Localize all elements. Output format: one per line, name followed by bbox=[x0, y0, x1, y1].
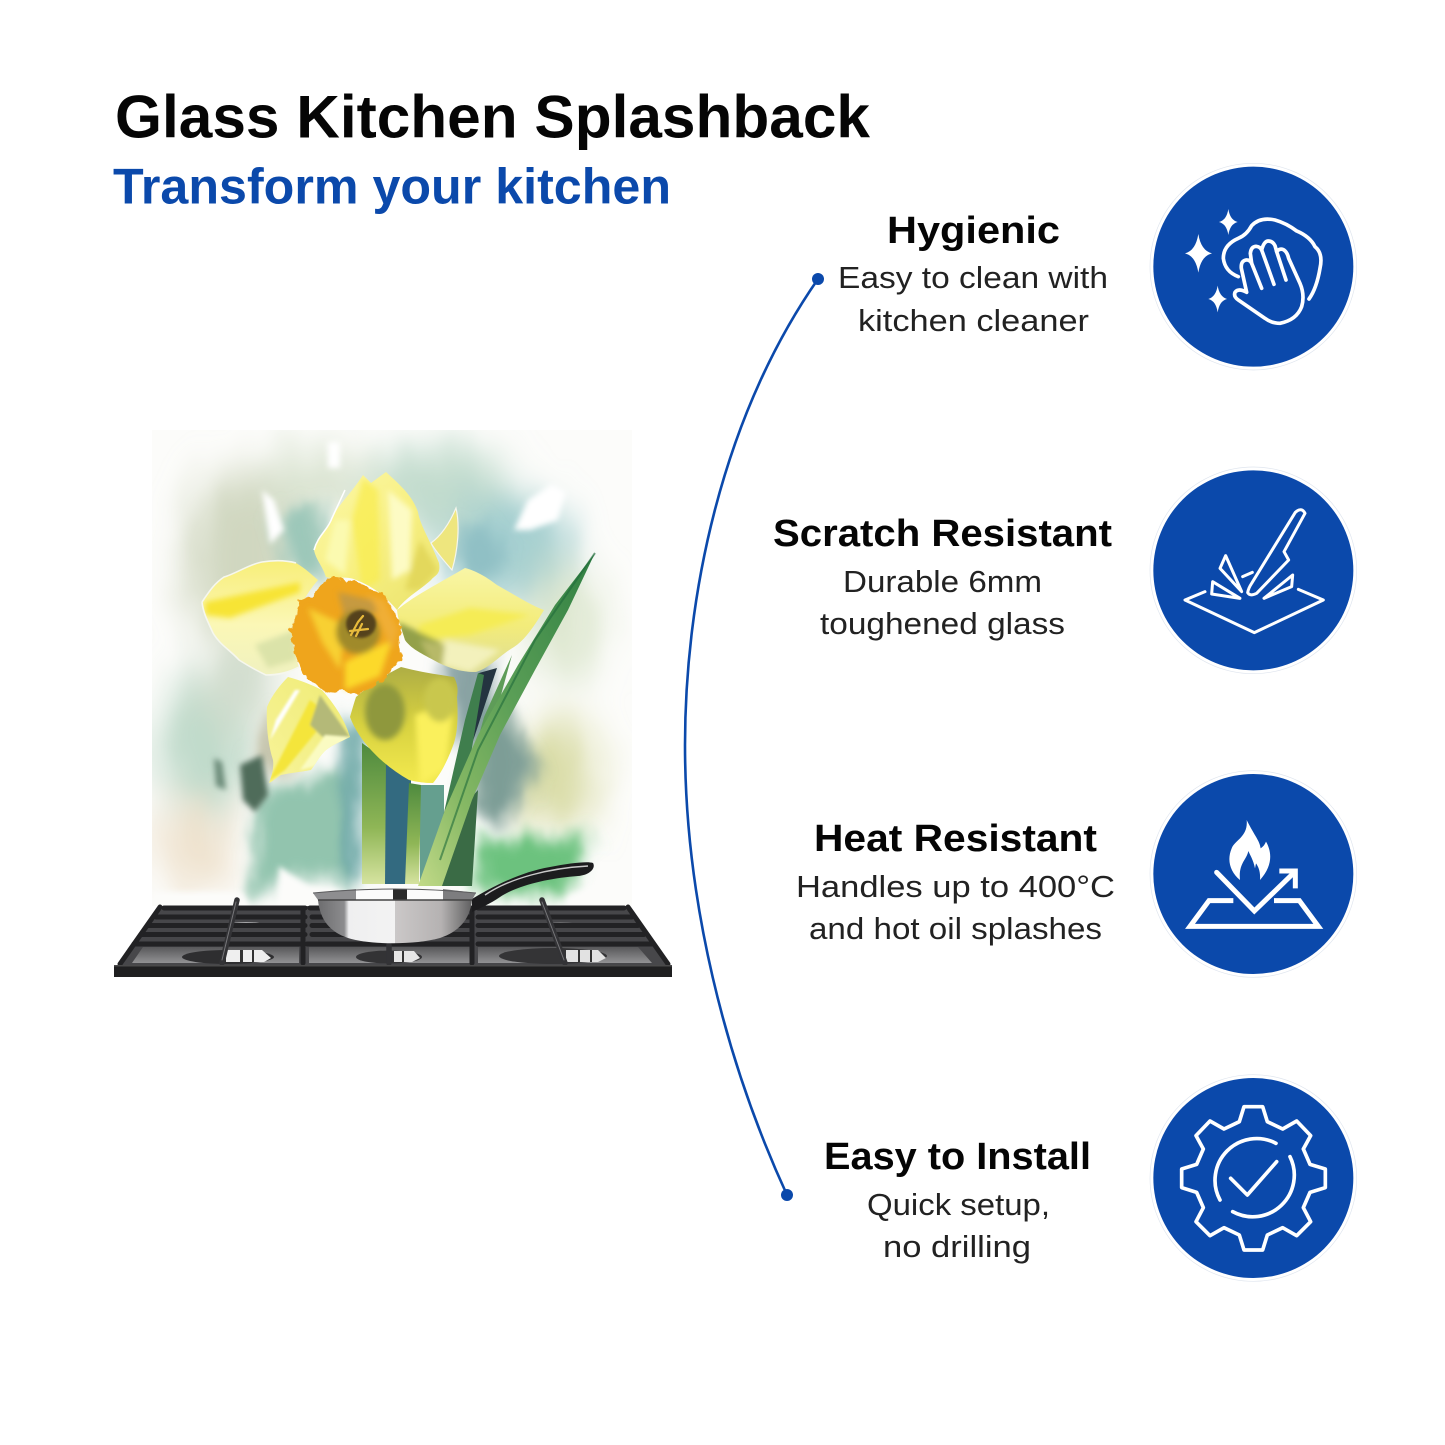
feature: easy to install text bbox=[824, 1136, 1091, 1264]
pan rim bbox=[313, 889, 476, 900]
corona bbox=[290, 575, 403, 695]
feature: heat resistant text: Handles up to 400°C bbox=[796, 869, 1115, 904]
pan handle bbox=[472, 862, 594, 912]
pan body bbox=[318, 900, 472, 943]
petal: right bbox=[395, 565, 547, 675]
feature: hygienic text: Hygienic bbox=[887, 210, 1060, 252]
panel: daffodil watercolour splashback bbox=[152, 430, 632, 916]
feature: heat resistant text: and hot oil splashes bbox=[809, 911, 1102, 946]
petal: top bbox=[310, 470, 445, 610]
petal: bottom left bbox=[266, 677, 350, 783]
feature: hygienic text: Easy to clean with bbox=[838, 260, 1108, 295]
icon: heat resistant flame bbox=[1150, 771, 1357, 977]
curve dot: top bbox=[812, 273, 824, 285]
petal: left bbox=[200, 560, 320, 678]
feature: scratch resistant text bbox=[773, 513, 1112, 641]
title: Glass Kitchen Splashback bbox=[115, 84, 871, 150]
hob front edge bbox=[114, 965, 672, 977]
pan bbox=[313, 862, 594, 943]
burner panels bbox=[132, 947, 652, 963]
feature: scratch resistant text: Scratch Resistant bbox=[773, 513, 1112, 555]
background wash bbox=[152, 442, 632, 916]
feature: heat resistant text: Heat Resistant bbox=[814, 818, 1097, 860]
cup centre bbox=[346, 610, 376, 638]
stems bbox=[362, 553, 595, 886]
feature: scratch resistant text: toughened glass bbox=[820, 606, 1065, 641]
feature: easy to install text: Quick setup, bbox=[867, 1187, 1050, 1222]
subtitle: Transform your kitchen bbox=[113, 158, 671, 214]
icon: hygienic hand wiping bbox=[1150, 163, 1357, 370]
burners bbox=[182, 922, 607, 964]
feature: easy to install text: no drilling bbox=[883, 1229, 1031, 1264]
petal: bottom bbox=[350, 667, 458, 783]
hob with pan bbox=[114, 862, 672, 977]
icon: scratch resistant knife on glass bbox=[1150, 467, 1357, 674]
hob base plate bbox=[114, 906, 672, 977]
grate bars bbox=[120, 900, 668, 964]
icon: easy install gear with check bbox=[1150, 1075, 1357, 1281]
feature: hygienic text: kitchen cleaner bbox=[858, 303, 1089, 338]
feature: easy to install text: Easy to Install bbox=[824, 1136, 1091, 1178]
feature: hygienic text bbox=[838, 210, 1108, 338]
connector curve bbox=[685, 273, 824, 1201]
leaf bbox=[418, 553, 595, 886]
curve dot: bottom bbox=[781, 1189, 793, 1201]
feature: scratch resistant text: Durable 6mm bbox=[843, 564, 1042, 599]
feature: heat resistant text bbox=[796, 818, 1115, 946]
petal: back bbox=[431, 508, 458, 570]
